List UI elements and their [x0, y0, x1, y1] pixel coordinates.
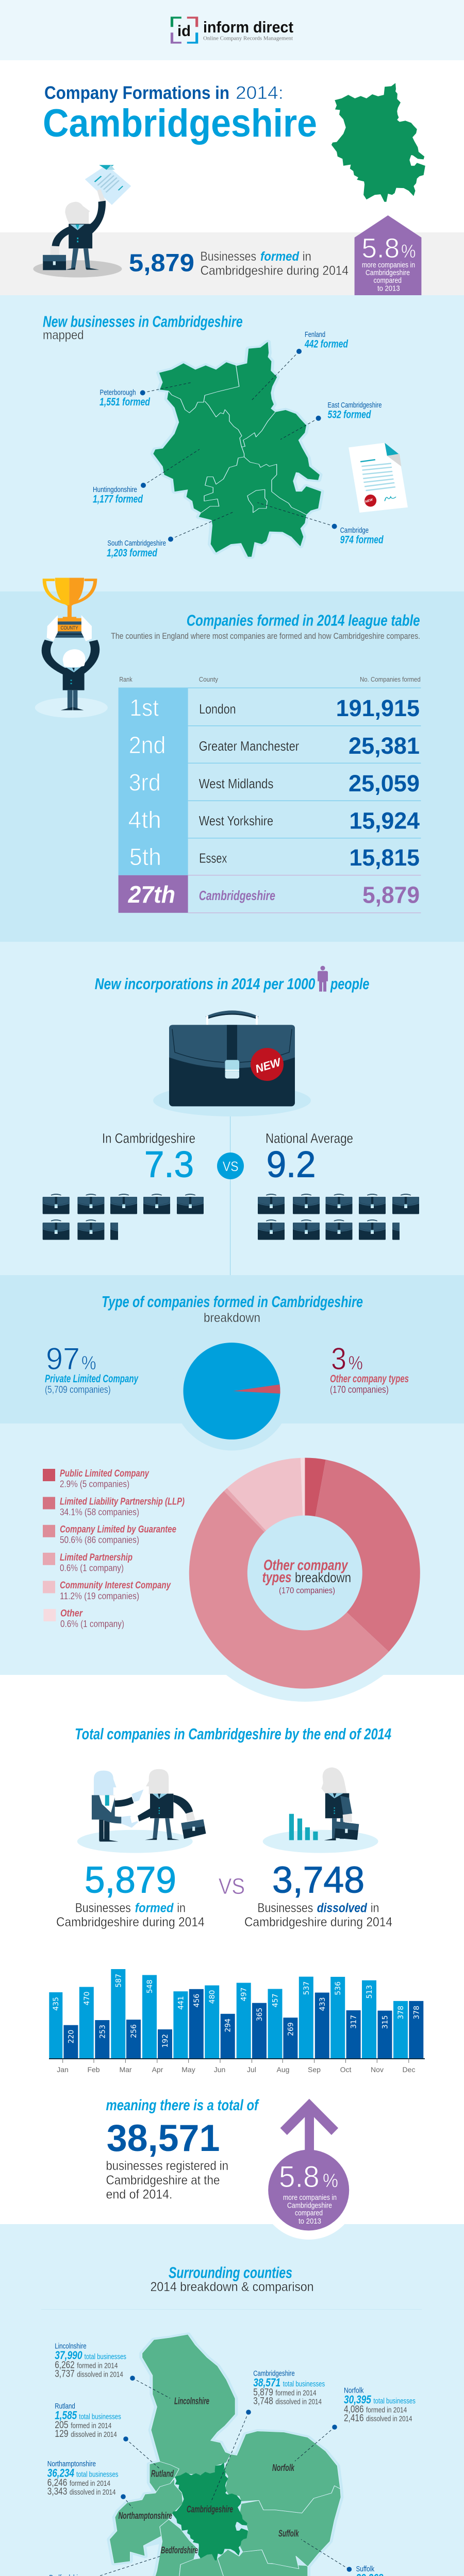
table: companies formed league: 191,915 [336, 695, 420, 721]
comparison: formed vs dissolved: in [177, 1901, 186, 1916]
bar chart: monthly formed and dissolved: 192 [161, 2034, 170, 2048]
comparison: formed vs dissolved: VS [219, 1874, 245, 1899]
map connectors and county names: Lincolnshire [174, 2396, 209, 2406]
stat: 97% private limited: % [81, 1352, 96, 1374]
label: Norfolk: total businesses [373, 2397, 416, 2405]
heading: new incorporations per 1000 people: New incorporations in 2014 per 1000 [95, 975, 315, 993]
callout: 5.8% more companies: compared [373, 277, 402, 285]
label: Lincolnshire: formed in 2014 [77, 2361, 118, 2370]
heading: type of companies: Type of companies formed in Cambridgeshire [102, 1293, 363, 1311]
logo: inform direct: inform direct [203, 18, 293, 36]
icons: briefcases 9.2 [258, 1194, 419, 1240]
label: Lincolnshire: 3,737 [55, 2369, 75, 2379]
map connectors and county names: Suffolk [278, 2529, 299, 2539]
bar chart: monthly formed and dissolved: May [181, 2065, 195, 2074]
table: companies formed league: Essex [199, 850, 227, 866]
callout: arrow up 5.8% growth [259, 2099, 358, 2240]
map labels: districts: Huntingdonshire [93, 486, 137, 494]
stat: 3% other types: Other company types [330, 1373, 409, 1385]
callout: 5.8% more companies [355, 215, 421, 295]
label: Norfolk: 2,416 [344, 2413, 364, 2424]
bar chart: monthly formed and dissolved: 587 [114, 1974, 123, 1988]
label: Norfolk [344, 2386, 416, 2424]
comparison: 7.3 vs 9.2: 9.2 [267, 1144, 316, 1185]
map labels: districts: 1,203 formed [107, 547, 158, 559]
label: Norfolk: formed in 2014 [366, 2406, 407, 2414]
map connectors and county names [89, 2376, 352, 2576]
table: companies formed league: 2nd [129, 732, 166, 758]
callout: arrow up 5.8% growth: Cambridgeshire [287, 2202, 332, 2210]
table: companies formed league: 5,879 [362, 882, 420, 908]
bar chart: monthly formed and dissolved: 435 [52, 1997, 60, 2011]
title: Company Formations in [44, 83, 229, 103]
callout: 5.8% more companies: 5.8 [362, 233, 400, 264]
donut chart: other company types: (170 companies) [279, 1585, 335, 1595]
pie chart: 97 vs 3 [172, 1331, 291, 1451]
legend: other company types: Community Interest Company [60, 1580, 171, 1591]
bar chart: monthly formed and dissolved: 317 [350, 2015, 358, 2029]
label: Lincolnshire: total businesses [85, 2352, 126, 2361]
label: Lincolnshire: 37,990 [55, 2349, 82, 2362]
label: Cambridgeshire: 5,879 [253, 2387, 273, 2398]
bar chart: monthly formed and dissolved: Aug [277, 2065, 289, 2074]
callout: 5.8% more companies: % [401, 241, 416, 262]
heading: New businesses mapped: mapped [43, 328, 84, 342]
comparison: formed vs dissolved: formed [135, 1901, 174, 1916]
label: Rutland: dissolved in 2014 [71, 2430, 117, 2439]
stat: 3% other types [330, 1342, 409, 1396]
label: Rutland: total businesses [79, 2413, 121, 2421]
callout: 5.8% more companies: more companies in [362, 261, 415, 269]
stat: total of 38,571: meaning there is a total of [106, 2097, 259, 2114]
bar chart: monthly formed and dissolved: 537 [303, 1981, 311, 1995]
bar chart: monthly formed and dissolved: Mar [119, 2065, 132, 2074]
callout: arrow up 5.8% growth: compared [295, 2209, 323, 2217]
bar chart: monthly formed and dissolved: 513 [366, 1985, 374, 1999]
callout: arrow up 5.8% growth: more companies in [283, 2194, 337, 2202]
heading: surrounding counties [41, 2264, 422, 2310]
comparison: formed vs dissolved: 5,879 [85, 1860, 176, 1901]
legend: other company types: 11.2% (19 companies) [60, 1591, 139, 1601]
stat: 97% private limited [45, 1342, 139, 1396]
table: companies formed league: 5th [129, 843, 161, 870]
map connectors and county names: Northamptonshire [119, 2511, 172, 2521]
icon: new document: NEW [364, 498, 374, 504]
bar chart: monthly formed and dissolved: 315 [382, 2015, 390, 2029]
bar chart: monthly formed and dissolved: 433 [319, 1997, 327, 2011]
stat: 5,879 businesses formed: 5,879 [129, 249, 194, 277]
map connectors and county names: Rutland [151, 2469, 174, 2479]
stat: 5,879 businesses formed: Cambridgeshire during 2014 [201, 264, 349, 278]
bar chart: monthly formed and dissolved: Jun [214, 2065, 225, 2074]
label: Cambridgeshire: formed in 2014 [275, 2388, 317, 2397]
stat: 5,879 businesses formed: formed [260, 249, 300, 264]
heading: surrounding counties: Surrounding counties [169, 2264, 292, 2282]
legend: other company types: 50.6% (86 companies) [60, 1535, 139, 1545]
bar chart: monthly formed and dissolved: 456 [193, 1994, 201, 2008]
table: companies formed league: 25,059 [349, 770, 420, 796]
callout: 5.8% more companies: Cambridgeshire [366, 269, 410, 277]
comparison: formed vs dissolved: Businesses [257, 1901, 313, 1916]
bar chart: monthly formed and dissolved: 470 [83, 1992, 91, 2005]
table: companies formed league: No. Companies formed [360, 675, 421, 683]
illustration: businessman holding document [33, 165, 131, 278]
map labels: districts: Fenland [305, 331, 325, 339]
comparison: 7.3 vs 9.2: In Cambridgeshire [102, 1131, 195, 1146]
label: Cambridgeshire: 3,748 [253, 2396, 273, 2406]
legend: other company types: 2.9% (5 companies) [60, 1479, 129, 1489]
map connectors and county names: Cambridgeshire [187, 2504, 233, 2515]
bar chart: monthly formed and dissolved: 378 [412, 2006, 421, 2020]
title [43, 83, 317, 145]
stat: total of 38,571 [106, 2097, 259, 2202]
label: Northamptonshire: 3,343 [47, 2486, 67, 2497]
bar chart: monthly formed and dissolved: Nov [371, 2065, 384, 2074]
bar chart: monthly formed and dissolved: 441 [177, 1996, 185, 2010]
map: surrounding counties [109, 2334, 341, 2576]
comparison: formed vs dissolved [56, 1860, 392, 1929]
legend: other company types [43, 1468, 185, 1629]
title: Cambridgeshire [43, 101, 317, 145]
label: Suffolk: Suffolk [356, 2565, 374, 2573]
comparison: 7.3 vs 9.2: 7.3 [144, 1144, 194, 1185]
table: companies formed league: 3rd [129, 769, 161, 796]
map labels: districts: 442 formed [304, 338, 349, 350]
illustration: man holding county trophy: COUNTY [61, 625, 78, 631]
label: Rutland: 205 [55, 2420, 69, 2431]
heading: new incorporations per 1000 people: people [330, 975, 369, 993]
stat: 97% private limited: 97 [46, 1342, 80, 1376]
heading: New businesses mapped: New businesses in Cambridgeshire [43, 313, 243, 331]
label: Norfolk: dissolved in 2014 [366, 2414, 412, 2424]
callout: arrow up 5.8% growth: 5.8 [279, 2160, 320, 2194]
map labels: districts: 1,551 formed [100, 396, 151, 408]
table: companies formed league: 4th [128, 806, 161, 833]
comparison: formed vs dissolved: Cambridgeshire during 2014 [244, 1915, 392, 1929]
callout: 5.8% more companies: to 2013 [377, 284, 400, 293]
stat: 3% other types: % [349, 1352, 363, 1374]
heading: type of companies: breakdown [204, 1311, 260, 1325]
bar chart: monthly formed and dissolved: Apr [152, 2065, 163, 2074]
logo: inform direct [172, 18, 293, 43]
legend: other company types: 0.6% (1 company) [60, 1619, 124, 1629]
map labels: districts: 974 formed [340, 534, 384, 546]
bar chart: monthly formed and dissolved: 480 [208, 1990, 217, 2004]
table: companies formed league: 1st [129, 694, 159, 721]
label: Northamptonshire: 36,234 [47, 2467, 74, 2480]
stat: 5,879 businesses formed: Businesses [201, 249, 256, 264]
label: Cambridgeshire [253, 2369, 325, 2406]
label: Norfolk: 4,086 [344, 2404, 364, 2415]
legend: other company types: Limited Partnership [60, 1552, 132, 1563]
heading: New businesses mapped [43, 313, 243, 342]
legend: other company types: 0.6% (1 company) [60, 1563, 124, 1573]
legend: other company types: Other [60, 1608, 83, 1619]
label: Cambridgeshire: dissolved in 2014 [275, 2397, 322, 2406]
label: Norfolk: 30,395 [344, 2393, 371, 2406]
table: companies formed league: London [199, 701, 236, 717]
icons: briefcases 7.3 [43, 1194, 204, 1240]
bar chart: monthly formed and dissolved: 378 [397, 2006, 405, 2020]
callout: arrow up 5.8% growth: to 2013 [299, 2217, 321, 2226]
logo: inform direct: Online Company Records Management [203, 36, 293, 41]
donut chart: other company types: Other company [263, 1557, 349, 1574]
title: 2014: [236, 83, 284, 103]
stat: 5,879 businesses formed: in [303, 249, 311, 264]
bar chart: monthly formed and dissolved: Dec [403, 2065, 415, 2074]
stat: total of 38,571: 38,571 [107, 2117, 220, 2159]
legend: other company types: 34.1% (58 companies) [60, 1507, 139, 1517]
map labels: districts: South Cambridgeshire [107, 539, 166, 548]
bar chart: monthly formed and dissolved: 497 [240, 1988, 248, 2001]
illustration: two men shaking hands [77, 1769, 206, 1853]
label: Rutland: formed in 2014 [71, 2421, 111, 2430]
table: companies formed league: Rank [119, 675, 132, 683]
label: Northamptonshire: Northamptonshire [47, 2460, 96, 2468]
comparison: formed vs dissolved: Businesses [75, 1901, 131, 1916]
label: Northamptonshire [47, 2460, 119, 2497]
heading: surrounding counties: 2014 breakdown & comparison [151, 2280, 313, 2294]
comparison: formed vs dissolved: Cambridgeshire during 2014 [56, 1915, 205, 1929]
table: companies formed league: 15,815 [350, 844, 420, 871]
stat: 5,879 businesses formed [129, 249, 349, 278]
label: Rutland: 129 [55, 2429, 69, 2439]
logo: inform direct: id [177, 23, 191, 40]
donut chart: other company types: breakdown [295, 1570, 351, 1585]
comparison: formed vs dissolved: 3,748 [272, 1860, 364, 1901]
table: companies formed league: West Yorkshire [199, 813, 273, 828]
stat: total of 38,571: Cambridgeshire at the [106, 2173, 220, 2188]
label: Lincolnshire: dissolved in 2014 [77, 2370, 123, 2379]
label: Cambridgeshire: Cambridgeshire [253, 2369, 295, 2378]
label: Rutland: Rutland [55, 2402, 75, 2411]
bar chart: monthly formed and dissolved: 294 [224, 2019, 233, 2032]
bar chart: monthly formed and dissolved: 253 [98, 2025, 107, 2039]
map labels: districts: 532 formed [328, 409, 371, 420]
callout: arrow up 5.8% growth: % [323, 2170, 338, 2192]
table: companies formed league [119, 675, 421, 913]
map labels: districts: Cambridge [340, 527, 369, 535]
bar chart: monthly formed and dissolved: 269 [287, 2022, 295, 2036]
label: Northamptonshire: 6,246 [47, 2478, 67, 2488]
comparison: formed vs dissolved: in [371, 1901, 379, 1916]
map connectors and county names: Norfolk [272, 2463, 295, 2473]
map labels: districts: 1,177 formed [93, 494, 143, 505]
bar chart: monthly formed and dissolved: Feb [87, 2065, 100, 2074]
label: Lincolnshire: Lincolnshire [55, 2342, 87, 2350]
label: Cambridgeshire: 38,571 [253, 2376, 280, 2389]
label: Northamptonshire: dissolved in 2014 [70, 2488, 115, 2497]
table: companies formed league: 15,924 [350, 808, 420, 834]
bar chart: monthly formed and dissolved: 220 [67, 2030, 75, 2043]
legend: other company types: Public Limited Company [60, 1468, 150, 1479]
bar chart: monthly formed and dissolved: Sep [308, 2065, 321, 2074]
map labels: districts: East Cambridgeshire [328, 401, 382, 410]
bar chart: monthly formed and dissolved: 536 [334, 1981, 342, 1995]
table: companies formed league: West Midlands [199, 776, 273, 791]
map: Cambridgeshire districts [153, 342, 321, 557]
table: companies formed league: Greater Manchester [199, 738, 299, 754]
label: Lincolnshire: 6,262 [55, 2360, 75, 2370]
label: Cambridgeshire: total businesses [283, 2380, 325, 2388]
heading: Companies formed league table [111, 612, 420, 641]
heading: new incorporations per 1000 people [95, 966, 369, 993]
comparison: 7.3 vs 9.2: VS [223, 1159, 239, 1174]
icon: new document [349, 443, 408, 513]
bar chart: monthly formed and dissolved: 365 [256, 2008, 264, 2021]
bar chart: monthly formed and dissolved [49, 1969, 425, 2074]
stat: total of 38,571: end of 2014. [106, 2188, 172, 2202]
table: companies formed league: 27th [128, 881, 175, 908]
stat: 97% private limited: Private Limited Company [45, 1373, 139, 1385]
icon: large briefcase with NEW badge [153, 1012, 311, 1116]
bar chart: monthly formed and dissolved: Jan [57, 2065, 69, 2074]
stat: 97% private limited: (5,709 companies) [45, 1385, 111, 1396]
bar chart: monthly formed and dissolved: 548 [146, 1979, 154, 1993]
map labels: districts: Peterborough [100, 388, 136, 397]
label: Lincolnshire [55, 2342, 126, 2379]
map labels: districts [93, 331, 384, 559]
icon: Cambridgeshire map small [332, 83, 425, 202]
icon: large briefcase with NEW badge: NEW [254, 1055, 283, 1075]
comparison: formed vs dissolved: dissolved [317, 1901, 367, 1916]
donut chart: other company types: types [262, 1569, 291, 1586]
illustration: man holding county trophy [35, 578, 108, 718]
label: Rutland [55, 2402, 121, 2439]
bar chart: monthly formed and dissolved: Jul [247, 2065, 256, 2074]
heading: type of companies [102, 1293, 363, 1325]
label: Rutland: 1,585 [55, 2409, 77, 2422]
label: Suffolk [356, 2565, 427, 2576]
legend: other company types: Limited Liability Partnership (LLP) [60, 1496, 185, 1507]
stat: 3% other types: 3 [331, 1342, 346, 1376]
illustration: man with declining bar chart [263, 1768, 378, 1853]
table: companies formed league: Cambridgeshire [199, 888, 275, 903]
label: Northamptonshire: total businesses [76, 2470, 119, 2479]
comparison: 7.3 vs 9.2: National Average [266, 1131, 353, 1146]
map connectors and county names: Bedfordshire [161, 2545, 198, 2555]
bar chart: monthly formed and dissolved: Oct [340, 2065, 351, 2074]
table: companies formed league: County [199, 675, 218, 683]
bar chart: monthly formed and dissolved: 256 [130, 2024, 138, 2038]
label: Norfolk: Norfolk [344, 2386, 364, 2395]
donut chart: other company types [176, 1444, 434, 1702]
stat: total of 38,571: businesses registered in [106, 2159, 228, 2173]
label: Northamptonshire: formed in 2014 [70, 2479, 110, 2488]
legend: other company types: Company Limited by Guarantee [60, 1524, 176, 1535]
bar chart: monthly formed and dissolved: 457 [271, 1994, 279, 2007]
table: companies formed league: 25,381 [349, 733, 420, 759]
stat: 3% other types: (170 companies) [330, 1385, 389, 1396]
comparison: 7.3 vs 9.2 [102, 1131, 353, 1185]
